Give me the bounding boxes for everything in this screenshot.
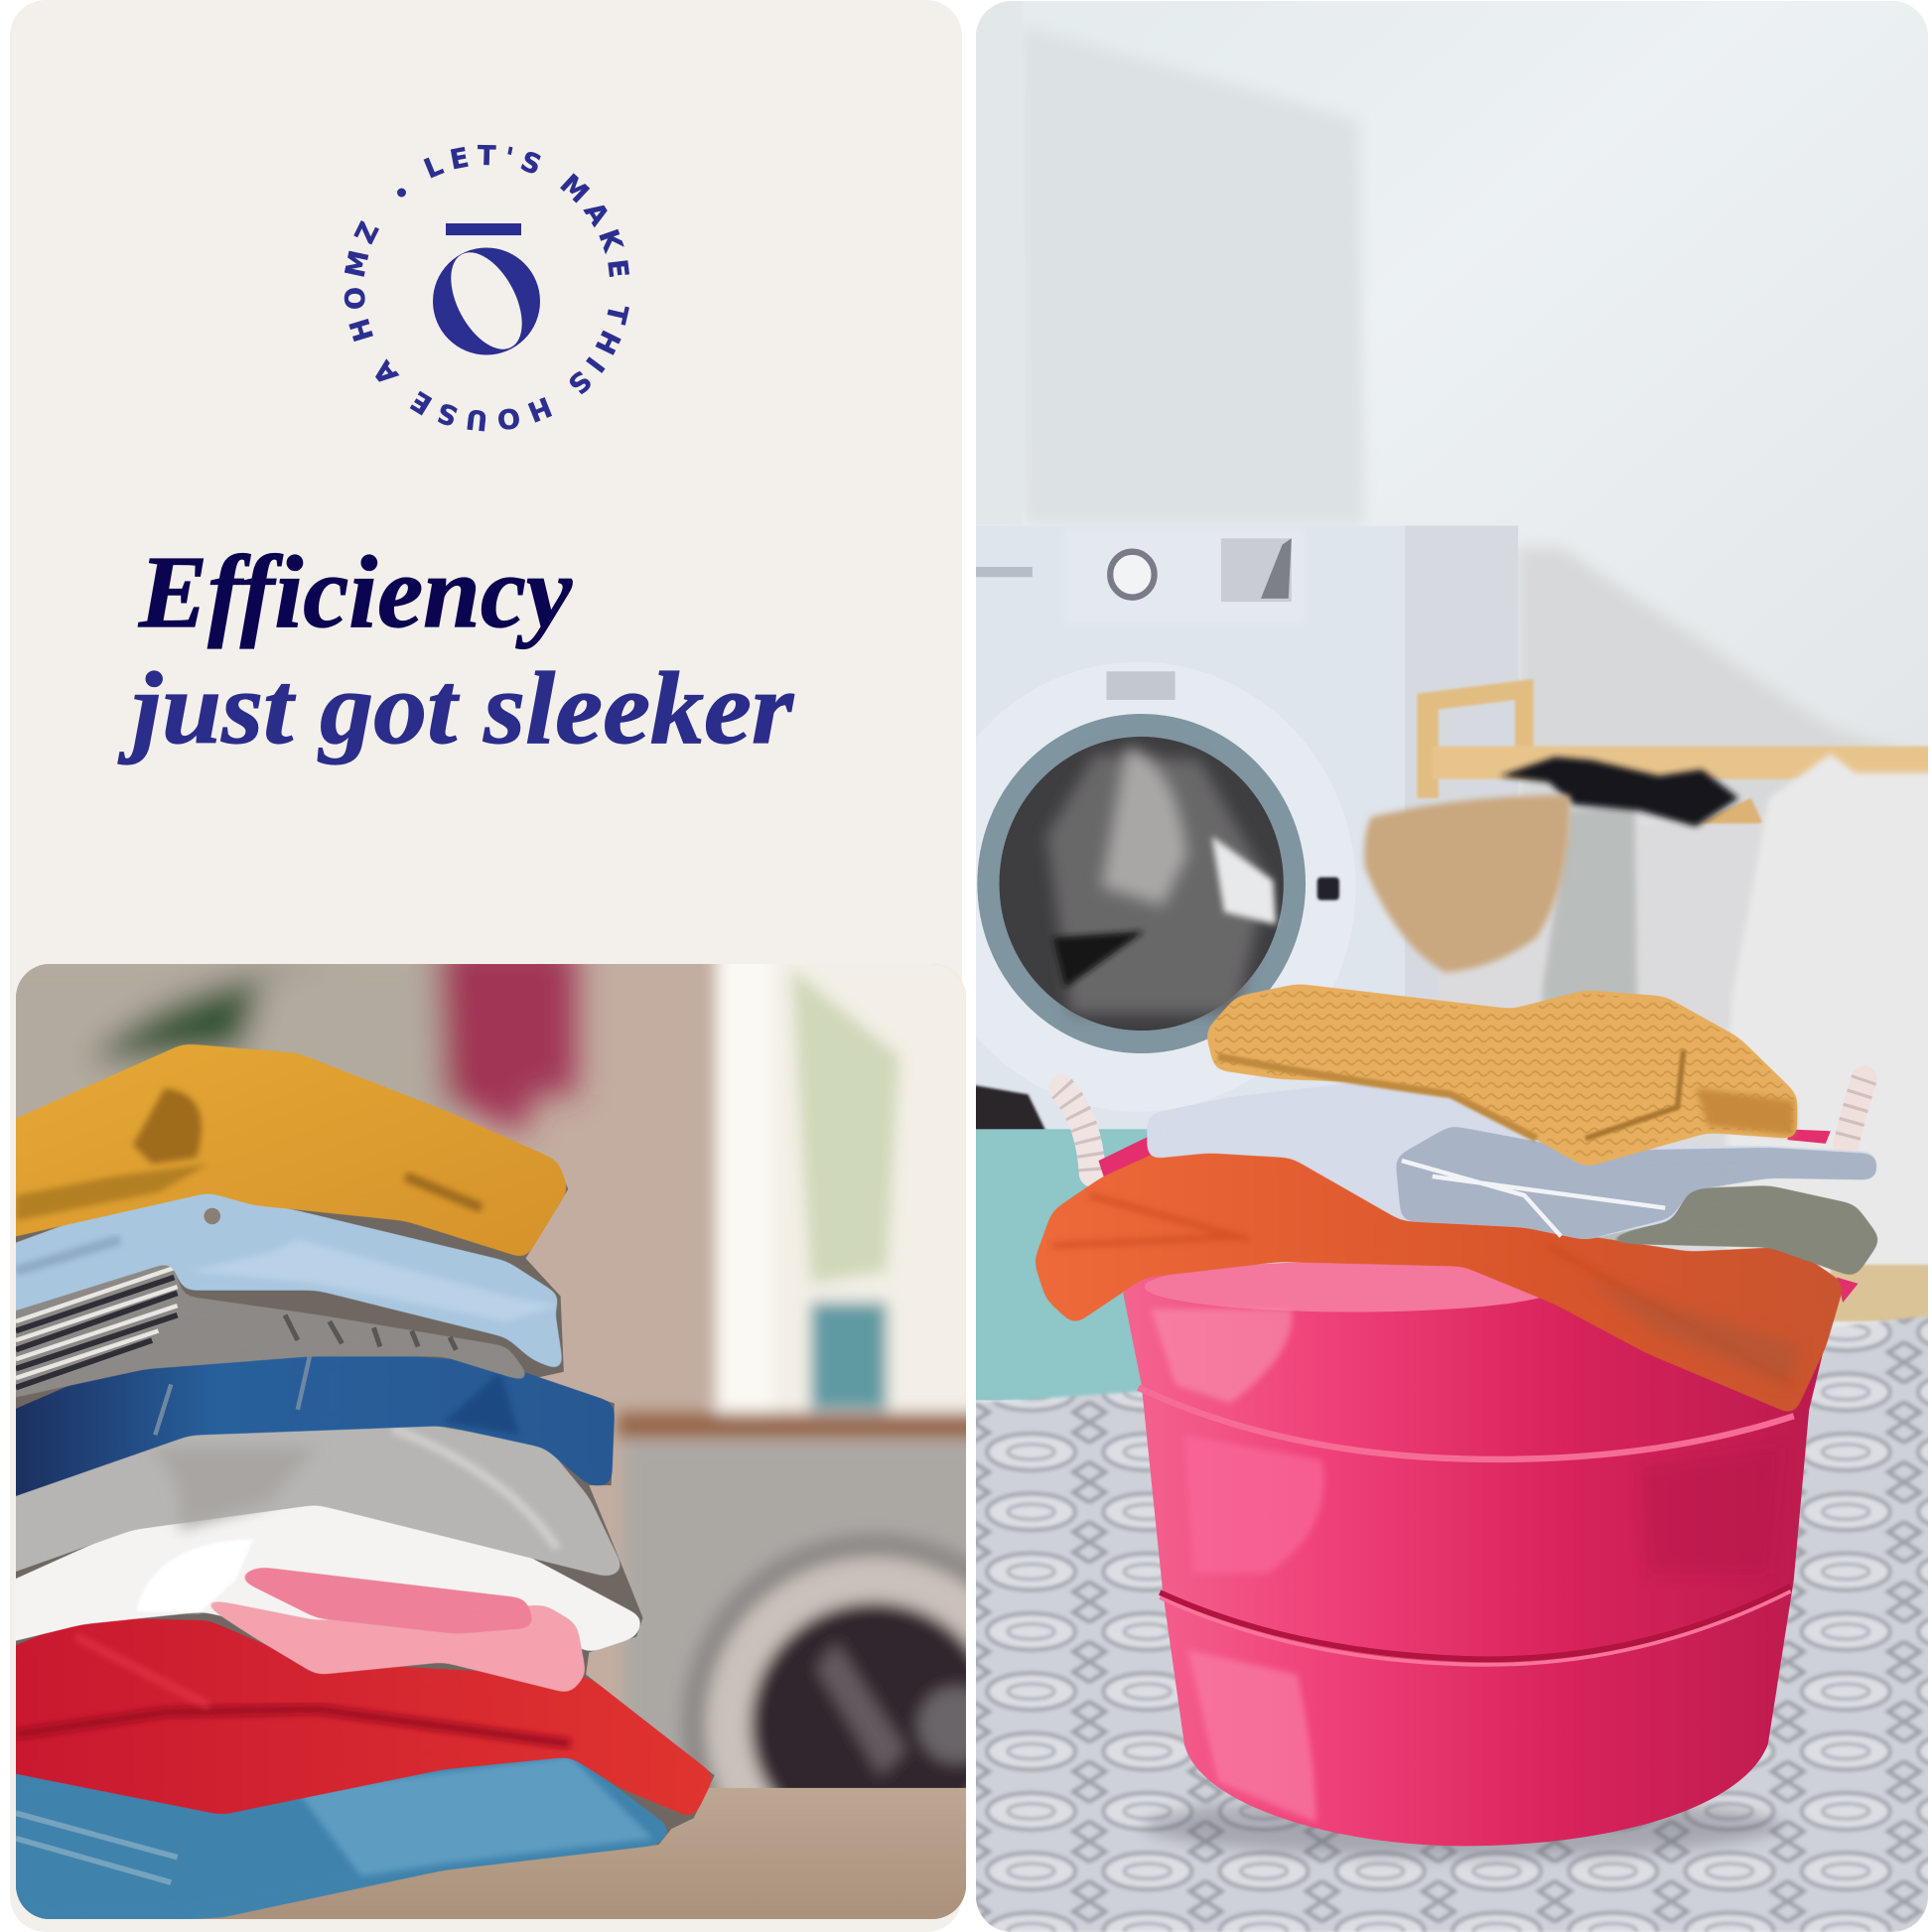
shirt: striped [0,1262,535,1400]
heading [117,535,795,765]
logo badge [344,145,629,431]
blue-grey blanket [1148,1082,1876,1239]
teal tub [973,1129,1230,1400]
green-grey towel [1586,1185,1880,1278]
pink bucket [1123,1262,1840,1846]
grey towel [1543,804,1644,1520]
panel: right laundry room photo [921,0,1932,1932]
wooden floor edge [1831,1265,1932,1321]
stack base shadow [16,1183,715,1919]
white towel [1726,754,1932,1520]
orange towel [1035,1142,1844,1415]
heading line 2: just got sleeker [117,651,795,765]
shirt: light blue [0,1192,564,1372]
bucket rim [1098,1129,1859,1303]
white fabric puff [136,1539,253,1612]
black cloth [1500,757,1738,827]
black item [973,1085,1077,1171]
wall with shadows [976,1,1928,824]
shirt: red [0,1617,715,1818]
tan sack [1364,795,1571,972]
laundry sack [1439,823,1769,1520]
washing machine [921,526,1405,1520]
shirt: grey [16,1426,621,1577]
wooden rack [1417,679,1932,843]
room background [976,1,1928,1404]
side cabinet [1405,526,1518,1520]
shirt: pink upper [234,1568,535,1633]
rope handle right [1846,1079,1864,1145]
photo: folded laundry stack [16,964,966,1919]
tiled floor [973,1315,1932,1932]
shirt: dark denim [0,1350,615,1501]
shirt: white [0,1501,643,1652]
foreground scene [973,984,1932,1932]
rope handle left [1061,1088,1092,1173]
blurred room background [16,964,966,1919]
heading line 1: Efficiency [138,535,573,649]
icon: o with macron [433,223,540,360]
shirt: mustard top [0,1044,568,1259]
shirt: pink lower [210,1601,586,1692]
mustard knit sweater [1205,984,1797,1167]
panel: left beige card [10,0,966,1932]
shirt: blue denim bottom [0,1753,671,1927]
bucket shadow [1145,1794,1781,1858]
circular slogan text: LET'S MAKE THIS HOUSE A HOMZ [344,145,629,431]
